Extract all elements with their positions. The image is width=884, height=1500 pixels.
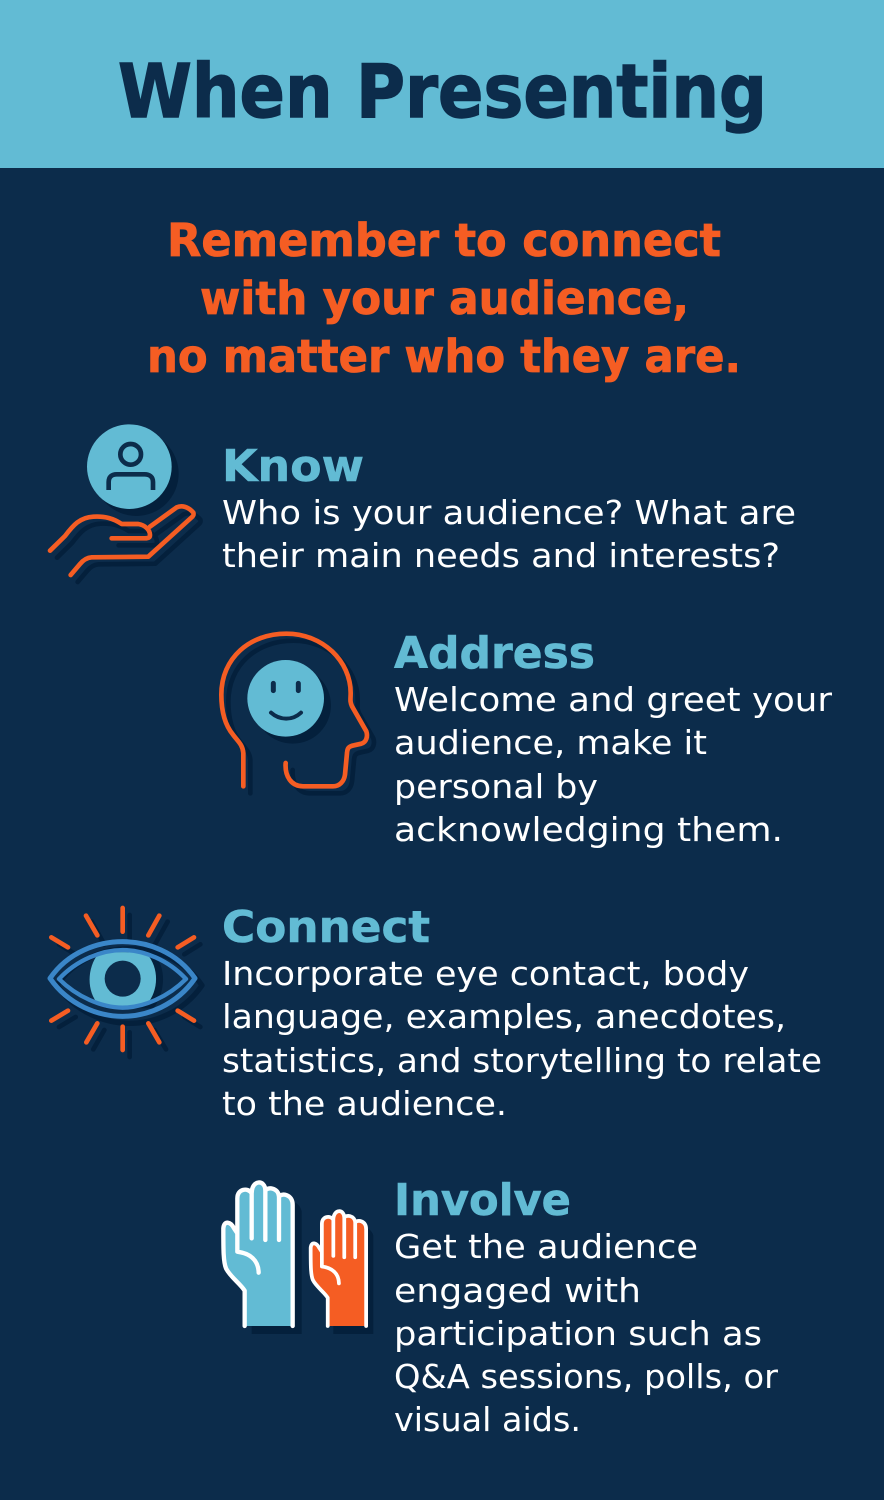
header band: [0, 0, 884, 168]
icon: person above open hand: [50, 424, 201, 582]
text block: Connect: [222, 902, 822, 1123]
text block: Address: audience, make it: [394, 723, 707, 762]
text block: Know: [222, 441, 796, 575]
title: When Presenting: [118, 49, 767, 135]
subheading: Remember to connect: [167, 214, 721, 267]
text block: Involve: participation such as: [394, 1314, 762, 1353]
text block: Involve: engaged with: [394, 1271, 641, 1310]
text block: Connect: to the audience.: [222, 1084, 507, 1123]
text block: Involve: visual aids.: [394, 1400, 581, 1439]
text block: Address: [394, 628, 832, 849]
text block: Involve: Q&A sessions, polls, or: [394, 1357, 778, 1396]
text block: Know: Who is your audience? What are: [222, 493, 796, 532]
text block: Involve: Get the audience: [394, 1227, 698, 1266]
hand shadows: [230, 1192, 373, 1334]
text block: Address: Welcome and greet your: [394, 680, 832, 719]
text block: Know: their main needs and interests?: [222, 536, 780, 575]
text block: Involve: Involve: [394, 1175, 571, 1226]
text block: Know: Know: [222, 441, 364, 492]
text block: Connect: statistics, and storytelling to relate: [222, 1041, 822, 1080]
text block: Connect: Incorporate eye contact, body: [222, 954, 749, 993]
icon: raised hands: [223, 1182, 373, 1334]
icon: eye with rays: [50, 908, 202, 1057]
subheading: no matter who they are.: [147, 330, 741, 383]
text block: Involve: [394, 1175, 778, 1439]
text block: Connect: Connect: [222, 902, 430, 953]
icon: head with smiling face: [221, 634, 374, 793]
text block: Address: personal by: [394, 767, 598, 806]
text block: Address: acknowledging them.: [394, 810, 783, 849]
text block: Connect: language, examples, anecdotes,: [222, 997, 786, 1036]
text block: Address: Address: [394, 628, 595, 679]
subheading: [147, 214, 741, 383]
subheading: with your audience,: [200, 272, 689, 325]
